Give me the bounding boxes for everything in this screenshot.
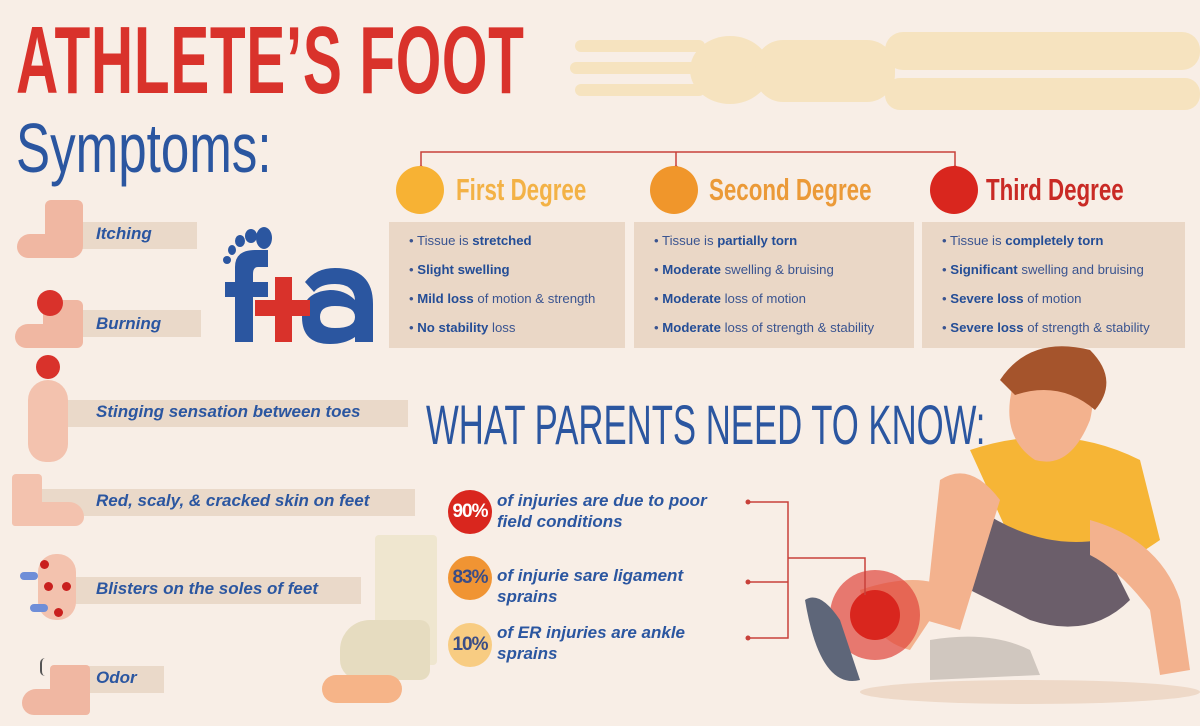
symptom: itching xyxy=(17,200,197,258)
symptom: odor xyxy=(22,658,164,715)
panel: first degree xyxy=(389,166,625,348)
panel: third degree: Severe loss of strength & stability xyxy=(950,320,1150,335)
stat 83%: 83% xyxy=(452,567,488,588)
panel: first degree: No stability loss xyxy=(417,320,515,335)
boy illustration xyxy=(805,346,1200,704)
stat texts xyxy=(497,491,708,531)
icon: foot with flame xyxy=(15,290,83,348)
panel: third degree: Tissue is completely torn xyxy=(950,233,1103,248)
panel: first degree: Tissue is stretched xyxy=(417,233,532,248)
symptom: red scaly skin xyxy=(12,474,415,526)
icon: foot side xyxy=(12,474,84,526)
icon: sole xyxy=(28,355,68,462)
symptom: blisters xyxy=(20,554,361,620)
symptom: blisters: Blisters on the soles of feet xyxy=(96,579,318,598)
icon: face first xyxy=(396,166,444,214)
symptom: stinging: Stinging sensation between toes xyxy=(96,402,360,421)
stat 83% xyxy=(448,556,492,600)
logo: f+a xyxy=(223,227,373,344)
text: sprains xyxy=(497,587,557,606)
stat texts: of injuries are due to poor xyxy=(497,491,707,510)
stat 90% xyxy=(448,490,492,534)
symptom: burning: Burning xyxy=(96,314,161,333)
icon: face second xyxy=(650,166,698,214)
stat 90%: 90% xyxy=(452,501,488,522)
text: of ER injuries are ankle xyxy=(497,623,685,642)
panel: second degree: Second Degree xyxy=(709,172,872,207)
panel: first degree: Slight swelling xyxy=(417,262,510,277)
subtitle: Symptoms: Symptoms: xyxy=(16,109,272,187)
text: of injurie sare ligament xyxy=(497,566,683,585)
stat 10%: 10% xyxy=(452,634,488,655)
panel: third degree xyxy=(922,166,1185,348)
heading: what parents need to know: WHAT PARENTS NEED TO KNOW: xyxy=(426,393,985,456)
bandaged ankle illustration xyxy=(322,535,437,703)
stats list xyxy=(448,490,492,667)
panel: first degree: First Degree xyxy=(456,172,586,207)
title: ATHLETE’S FOOT xyxy=(16,7,524,114)
connector bracket xyxy=(746,500,866,640)
text: sprains xyxy=(497,644,557,663)
symptom: burning xyxy=(15,290,201,348)
symptom: itching: Itching xyxy=(96,224,152,243)
panel: second degree: Moderate loss of motion xyxy=(662,291,806,306)
symptom: odor: Odor xyxy=(96,668,137,687)
icon: foot with odor xyxy=(22,658,90,715)
panel: second degree: Tissue is partially torn xyxy=(662,233,797,248)
panel: second degree xyxy=(634,166,914,348)
connector line for degrees xyxy=(420,151,957,166)
panel: third degree: Severe loss of motion xyxy=(950,291,1082,306)
stat 10% xyxy=(448,623,492,667)
icon: foot xyxy=(17,200,83,258)
panel: second degree: Moderate loss of strength & stability xyxy=(662,320,874,335)
icon: face third xyxy=(930,166,978,214)
panel: second degree: Moderate swelling & bruising xyxy=(662,262,834,277)
icon: blistered sole xyxy=(20,554,76,620)
symptom: stinging xyxy=(28,355,408,462)
symptom: red scaly skin: Red, scaly, & cracked skin on feet xyxy=(96,491,369,510)
panel: first degree: Mild loss of motion & strength xyxy=(417,291,595,306)
panel: third degree: Significant swelling and bruising xyxy=(950,262,1144,277)
panel: third degree: Third Degree xyxy=(986,172,1124,207)
bone illustration xyxy=(570,32,1200,110)
stat texts: field conditions xyxy=(497,512,623,531)
